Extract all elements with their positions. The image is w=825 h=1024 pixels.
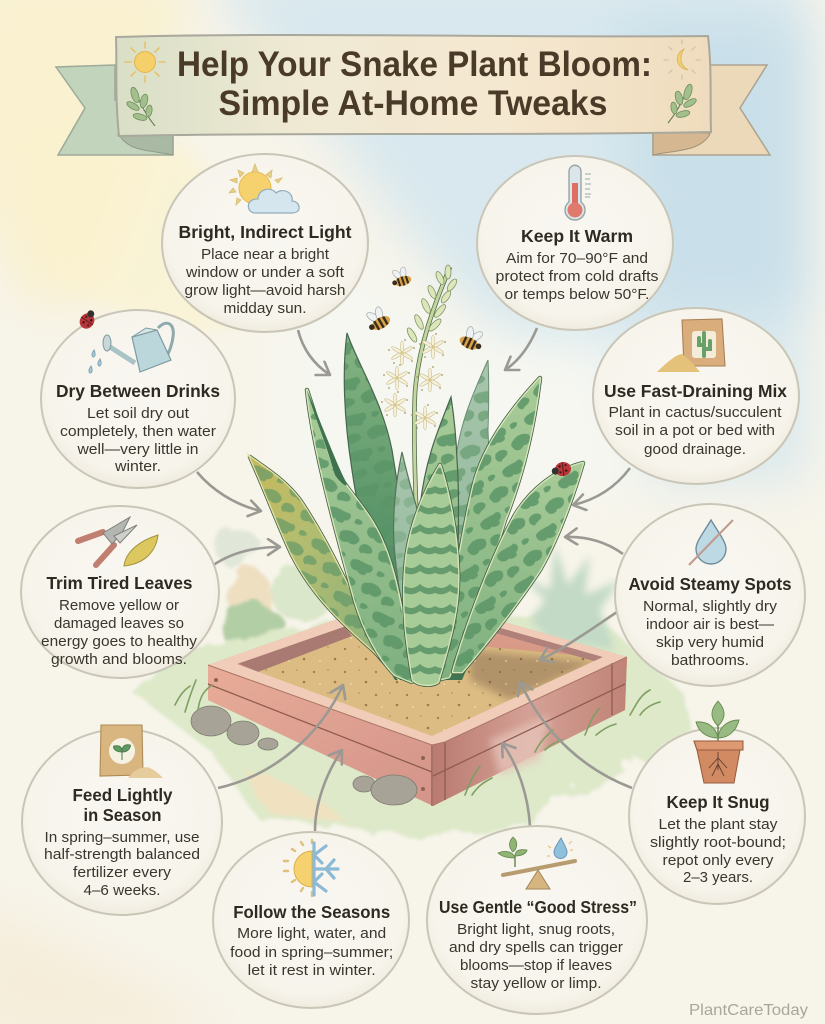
ribbon folds (118, 130, 173, 155)
icon: left sprig (125, 86, 155, 126)
panel: Trim Tired Leaves: growth and blooms. (51, 651, 187, 668)
icon: sun (125, 42, 165, 82)
left leaves (250, 390, 412, 682)
icon: half sun half snowflake (284, 840, 338, 896)
panel: Feed Lightly in Season: fertilizer every (73, 864, 172, 881)
panel: Feed Lightly in Season: half-strength balanced (44, 846, 200, 863)
panel: Avoid Steamy Spots: Avoid Steamy Spots (628, 574, 792, 594)
panel: Keep It Snug: 2–3 years. (683, 869, 753, 886)
soil (257, 633, 603, 737)
panel: Dry Between Drinks: Dry Between Drinks (56, 381, 220, 401)
icon: thermometer (565, 165, 591, 220)
panel: Follow the Seasons: food in spring–summer; (230, 944, 393, 961)
panel: Follow the Seasons (213, 832, 409, 1008)
panel: Follow the Seasons: let it rest in winter. (248, 962, 376, 979)
panel: Feed Lightly in Season: In spring–summer, use (44, 829, 200, 846)
panel: Keep It Warm: or temps below 50°F. (504, 286, 650, 303)
arrows (197, 328, 632, 831)
title banner: Simple At-Home Tweaks (218, 84, 608, 123)
left ribbon tail (56, 65, 173, 155)
front leaf (404, 465, 458, 685)
narrow pale leaf (394, 452, 428, 640)
stones and grass (175, 680, 660, 805)
panel: Use Gentle “Good Stress”: blooms—stop if leaves (460, 957, 612, 974)
panel: Use Gentle “Good Stress”: Bright light, snug roots, (457, 921, 615, 938)
panel: Bright, Indirect Light: window or under a soft (185, 264, 345, 281)
panel: Use Fast-Draining Mix: soil in a pot or bed with (615, 422, 775, 439)
icon: sun and cloud (229, 164, 299, 213)
panel: Feed Lightly in Season: 4–6 weeks. (84, 882, 160, 899)
panel: Feed Lightly in Season: Feed Lightly (72, 785, 173, 805)
icon: moon (664, 40, 700, 79)
watermark: PlantCareToday (689, 1002, 808, 1019)
icon: fertilizer bag (100, 725, 163, 778)
panel: Feed Lightly in Season: in Season (84, 805, 162, 825)
panel: Bright, Indirect Light: grow light—avoid harsh (184, 282, 346, 299)
icon: right sprig (668, 83, 698, 123)
panel: Keep It Warm: protect from cold drafts (496, 268, 658, 285)
panel: Use Gentle “Good Stress” (427, 826, 647, 1014)
panel: Dry Between Drinks: winter. (114, 458, 161, 475)
panel: Use Gentle “Good Stress”: and dry spells can trigger (449, 939, 623, 956)
panel: Keep It Snug: Let the plant stay (658, 816, 778, 833)
panel: Dry Between Drinks (41, 308, 235, 488)
bees and ladybug (362, 265, 572, 478)
icon: pruners and yellow leaf (78, 517, 158, 566)
panel: Avoid Steamy Spots (615, 504, 805, 686)
panel: Follow the Seasons: More light, water, and (237, 925, 386, 942)
panel: Follow the Seasons: Follow the Seasons (233, 902, 390, 922)
panel: Trim Tired Leaves: energy goes to healthy (41, 633, 198, 650)
panel: Trim Tired Leaves: Remove yellow or (59, 597, 179, 614)
panel: Dry Between Drinks: well—very little in (76, 441, 198, 458)
icon: balance with plant and drop (498, 837, 575, 889)
panel: Dry Between Drinks: completely, then water (60, 423, 216, 440)
panel: Trim Tired Leaves: damaged leaves so (54, 615, 184, 632)
banner body (116, 35, 711, 136)
panel: Keep It Snug: slightly root-bound; (650, 834, 786, 851)
icon: potted plant with roots (694, 701, 743, 783)
icon: ladybug (77, 308, 99, 332)
panel: Bright, Indirect Light: Bright, Indirect Light (178, 222, 352, 242)
panel: Keep It Snug: Keep It Snug (666, 792, 770, 812)
right ribbon tail (653, 65, 770, 155)
back leaves (344, 333, 489, 670)
panel: Use Gentle “Good Stress”: Use Gentle “Good Stress” (439, 897, 637, 917)
icon: soil bag with cactus (657, 319, 725, 372)
snake plant (250, 265, 583, 685)
flower stalk (381, 265, 458, 560)
panel: Avoid Steamy Spots: Normal, slightly dry (643, 598, 778, 615)
icon: crossed-out water drop (689, 520, 733, 565)
panel: Use Fast-Draining Mix (593, 308, 799, 484)
panel: Use Fast-Draining Mix: good drainage. (644, 441, 746, 458)
panel: Use Gentle “Good Stress”: stay yellow or limp. (470, 975, 602, 992)
rim (208, 617, 627, 745)
garden wash behind the bed (130, 528, 690, 835)
panel: Bright, Indirect Light: midday sun. (224, 300, 306, 317)
panel: Use Fast-Draining Mix: Use Fast-Draining Mix (604, 381, 787, 401)
title text: Help Your Snake Plant Bloom: (177, 45, 652, 84)
panel: Keep It Warm: Keep It Warm (521, 226, 633, 246)
panel: Trim Tired Leaves (21, 506, 219, 678)
title banner (56, 35, 770, 155)
panel: Bright, Indirect Light: Place near a bright (201, 246, 330, 263)
panel: Avoid Steamy Spots: bathrooms. (671, 652, 749, 669)
panel: Dry Between Drinks: Let soil dry out (87, 405, 190, 422)
raised wooden bed (208, 617, 627, 806)
panel: Keep It Warm: Aim for 70–90°F and (506, 250, 648, 267)
panel: Avoid Steamy Spots: skip very humid (656, 634, 764, 651)
panel: Trim Tired Leaves: Trim Tired Leaves (46, 573, 193, 593)
icon: watering can (89, 323, 173, 373)
panel: Feed Lightly in Season (22, 725, 222, 915)
dark base of leaves (360, 590, 500, 680)
panel: Use Fast-Draining Mix: Plant in cactus/succulent (608, 404, 782, 421)
inner walls (237, 625, 352, 672)
panel: Keep It Snug (629, 701, 805, 904)
panel: Keep It Snug: repot only every (662, 852, 774, 869)
panel: Bright, Indirect Light (162, 154, 368, 332)
right leaves (437, 378, 583, 680)
panel: Keep It Warm (477, 156, 673, 330)
panel: Avoid Steamy Spots: indoor air is best— (646, 616, 774, 633)
